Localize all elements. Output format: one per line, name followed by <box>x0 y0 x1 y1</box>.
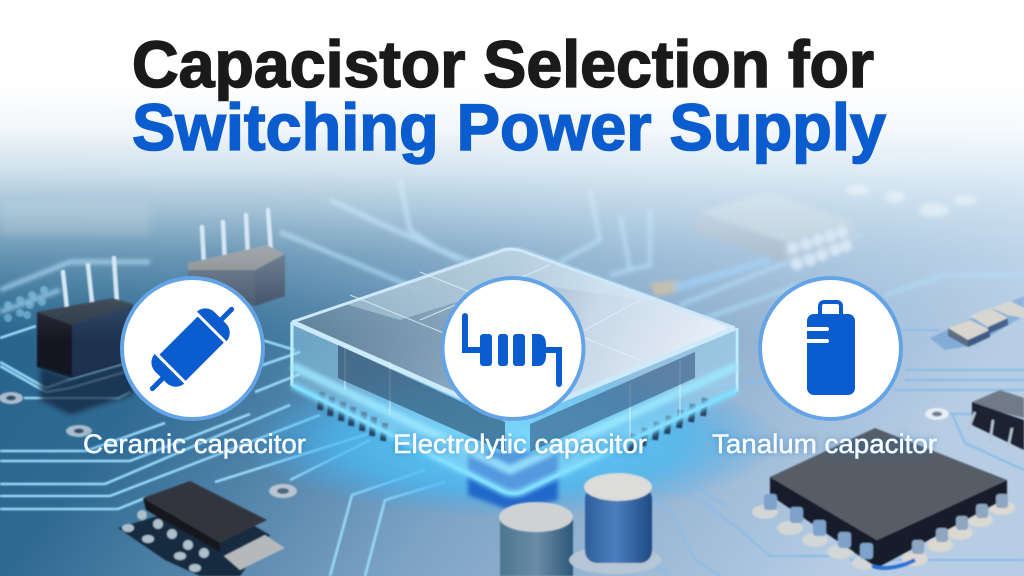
icon: electrolytic capacitor <box>465 316 559 384</box>
dark chip, bottom left <box>118 481 285 576</box>
central glow under chip <box>240 362 780 518</box>
title <box>132 27 886 164</box>
title line 2: Switching Power Supply <box>132 90 886 164</box>
white fade behind title <box>0 0 1024 340</box>
cylindrical capacitor, front <box>499 502 573 576</box>
black pin header, left <box>37 258 133 415</box>
electrolytic label: Electrolytic capacitor <box>393 429 647 459</box>
icon: ceramic capacitor <box>135 292 247 404</box>
tantalum icon badge <box>760 278 901 419</box>
large QFP chip, lower right <box>752 428 1015 570</box>
small white SMD parts, right <box>930 296 1024 350</box>
glass processor chip <box>290 246 737 494</box>
cylindrical capacitor, rear <box>569 473 661 574</box>
far blurred board traces <box>0 180 1024 320</box>
blue substrate under glass chip <box>468 452 558 512</box>
electrolytic capacitor item <box>393 278 647 459</box>
via pads, left <box>0 392 297 498</box>
pin rows under glass chip <box>320 392 705 452</box>
foreground left traces <box>0 326 445 576</box>
upper right chip <box>650 185 977 296</box>
dotted pad field, upper left <box>4 286 48 322</box>
ceramic capacitor item <box>83 278 306 459</box>
blurred upper-left component <box>0 203 150 235</box>
tantalum label: Tanalum capacitor <box>712 429 937 459</box>
tantalum capacitor item <box>712 278 937 459</box>
right side traces <box>590 330 1024 576</box>
ceramic icon badge <box>122 278 263 419</box>
via pad, right <box>925 408 949 420</box>
ceramic label: Ceramic capacitor <box>83 429 306 459</box>
electrolytic icon badge <box>442 278 584 419</box>
icon: tantalum capacitor <box>807 302 855 395</box>
black pin header, back <box>188 210 285 306</box>
small dark chip, right edge <box>968 390 1024 450</box>
title line 1: Capacistor Selection for <box>132 27 874 101</box>
